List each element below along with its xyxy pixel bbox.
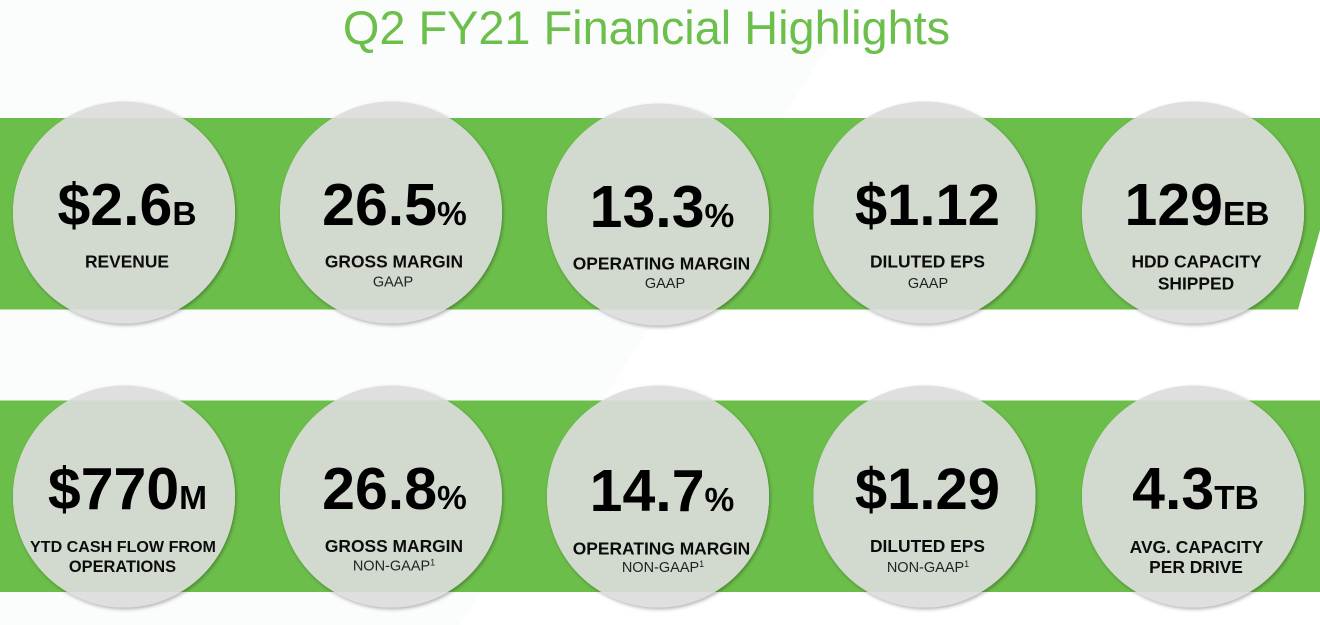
metric: HDD capacity shipped xyxy=(1082,102,1304,324)
metric: revenue xyxy=(13,102,235,324)
metric: diluted EPS non-GAAP: $1.29 xyxy=(855,457,1000,522)
metric: gross margin non-GAAP xyxy=(280,386,502,608)
metric: average capacity per drive: AVG. CAPACITY xyxy=(1130,537,1264,557)
metric: diluted EPS GAAP: DILUTED EPS xyxy=(870,252,985,272)
metric: diluted EPS GAAP: $1.12 xyxy=(855,173,1000,238)
metric: YTD cash flow from operations: YTD CASH FLOW FROM xyxy=(30,538,216,556)
metric: diluted EPS non-GAAP: DILUTED EPS xyxy=(870,536,985,556)
metric: operating margin GAAP: GAAP xyxy=(645,276,685,292)
metric: YTD cash flow from operations: $770M xyxy=(48,456,207,522)
metric: gross margin GAAP: 26.5% xyxy=(322,172,467,238)
metric: diluted EPS non-GAAP: NON-GAAP xyxy=(887,560,964,576)
metric: YTD cash flow from operations: OPERATIONS xyxy=(69,558,176,576)
metric: operating margin non-GAAP: OPERATING MARGIN xyxy=(573,538,750,558)
metric: diluted EPS GAAP: GAAP xyxy=(908,276,948,292)
metric: diluted EPS non-GAAP xyxy=(814,386,1036,608)
green band: top row xyxy=(0,118,1320,310)
metric: gross margin non-GAAP: 26.8% xyxy=(322,456,467,522)
metric: operating margin non-GAAP: 14.7% xyxy=(590,458,734,524)
metric: operating margin non-GAAP: NON-GAAP xyxy=(622,560,699,576)
metric: gross margin GAAP xyxy=(280,102,502,324)
green band: bottom row xyxy=(0,400,1320,592)
metric: YTD cash flow from operations xyxy=(13,386,235,608)
metric: HDD capacity shipped: HDD CAPACITY xyxy=(1131,252,1262,272)
metric: operating margin GAAP xyxy=(547,104,769,326)
metric: average capacity per drive: PER DRIVE xyxy=(1149,557,1243,577)
background: faint slanted shape xyxy=(0,0,858,625)
metric: operating margin non-GAAP: 1 xyxy=(699,559,704,569)
metric: gross margin non-GAAP: GROSS MARGIN xyxy=(325,536,463,556)
metric: gross margin GAAP: GROSS MARGIN xyxy=(325,252,463,272)
metric: HDD capacity shipped: 129EB xyxy=(1124,172,1270,238)
metric: revenue: REVENUE xyxy=(85,252,169,272)
metric: operating margin GAAP: 13.3% xyxy=(590,174,734,240)
metric: gross margin non-GAAP: 1 xyxy=(430,558,435,568)
title: Q2 FY21 Financial Highlights xyxy=(343,2,950,54)
metric: revenue: $2.6B xyxy=(57,172,197,238)
metric: gross margin GAAP: GAAP xyxy=(373,274,413,290)
metric: HDD capacity shipped: SHIPPED xyxy=(1158,274,1234,294)
metric: gross margin non-GAAP: NON-GAAP xyxy=(353,558,430,574)
metric: diluted EPS non-GAAP: 1 xyxy=(964,559,969,569)
metric: operating margin GAAP: OPERATING MARGIN xyxy=(573,254,750,274)
metric: average capacity per drive xyxy=(1082,386,1304,608)
metric: average capacity per drive: 4.3TB xyxy=(1132,456,1259,522)
metric: operating margin non-GAAP xyxy=(547,386,769,608)
metric: diluted EPS GAAP xyxy=(814,102,1036,324)
